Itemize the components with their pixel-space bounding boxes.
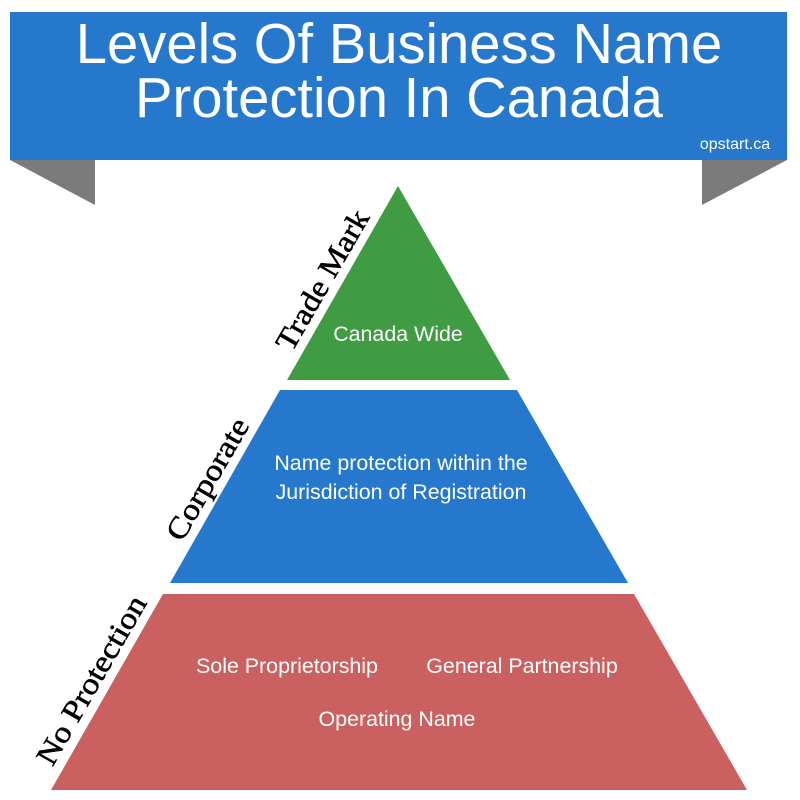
tier description: Canada Wide <box>333 322 463 346</box>
panel: trade mark tier <box>287 186 510 380</box>
left ribbon fold <box>10 160 95 205</box>
tier description second line: Jurisdiction of Registration <box>276 480 526 504</box>
item: operating name: Operating Name <box>319 707 475 731</box>
label: no protection: No Protection <box>30 590 154 771</box>
label: trade mark: Trade Mark <box>269 204 376 356</box>
source: opstart.ca <box>700 136 770 153</box>
title: Levels Of Business Name <box>76 12 722 75</box>
right ribbon fold <box>702 160 787 205</box>
panel: no protection tier <box>51 594 747 790</box>
item: general partnership: General Partnership <box>426 654 618 678</box>
panel: corporate tier <box>170 390 628 583</box>
item: sole proprietorship: Sole Proprietorship <box>196 654 378 678</box>
title second line: Protection In Canada <box>135 66 664 129</box>
title banner <box>10 12 787 160</box>
label: corporate: Corporate <box>159 412 256 546</box>
tier description: Name protection within the <box>274 451 528 475</box>
